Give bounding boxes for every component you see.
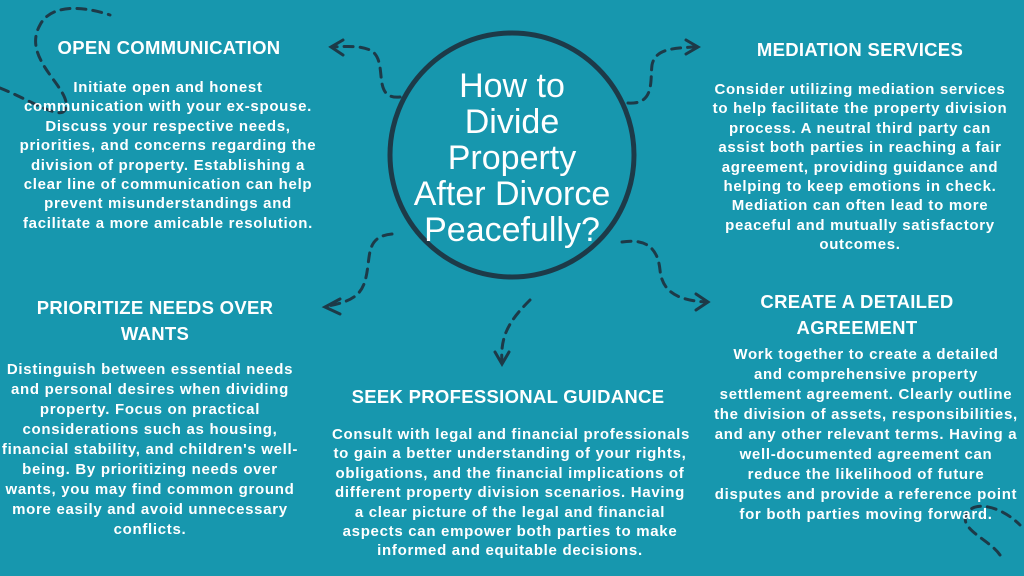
text: prioritize needs: and personal desires when dividing bbox=[11, 381, 289, 398]
text: create agreement: settlement agreement. Clearly outline bbox=[720, 386, 1012, 403]
circle bbox=[390, 33, 634, 277]
text: open communication: facilitate a more amicable resolution. bbox=[23, 215, 313, 232]
text: create agreement: for both parties moving forward. bbox=[739, 506, 993, 523]
text: prioritize needs: being. By prioritizing needs over bbox=[22, 461, 278, 478]
text: prioritize needs: financial stability, and children's well- bbox=[2, 441, 298, 458]
text: prioritize needs: considerations such as housing, bbox=[22, 421, 278, 438]
text: create agreement: and comprehensive property bbox=[754, 366, 978, 383]
text: mediation services: peaceful and mutually satisfactory bbox=[725, 217, 995, 234]
heading: prioritize needs: PRIORITIZE NEEDS OVER bbox=[37, 297, 273, 318]
text: prioritize needs bbox=[2, 361, 298, 538]
text: open communication: Discuss your respective needs, bbox=[45, 118, 291, 135]
text: create agreement: and any other relevant terms. Having a bbox=[715, 426, 1017, 443]
text: mediation services: Consider utilizing mediation services bbox=[715, 81, 1005, 98]
text: mediation services: to help facilitate the property division bbox=[713, 100, 1007, 117]
title: Property bbox=[448, 139, 576, 177]
title: How to bbox=[459, 67, 565, 105]
text: open communication bbox=[20, 79, 316, 232]
title bbox=[414, 67, 610, 249]
text: mediation services bbox=[712, 81, 1007, 253]
heading: open communication: OPEN COMMUNICATION bbox=[58, 37, 280, 58]
text: seek professional guidance: to gain a better understanding of your rights, bbox=[333, 445, 687, 462]
heading: mediation services: MEDIATION SERVICES bbox=[757, 39, 963, 60]
arrow: top-right bbox=[628, 40, 698, 103]
heading: seek professional guidance: SEEK PROFESSIONAL GUIDANCE bbox=[352, 386, 664, 407]
text: prioritize needs: Distinguish between essential needs bbox=[7, 361, 293, 378]
text: seek professional guidance: obligations, and the financial implications of bbox=[336, 465, 684, 482]
text: create agreement: well-documented agreement can bbox=[740, 446, 992, 463]
arrow: top-left bbox=[331, 40, 400, 97]
text: open communication: priorities, and concerns regarding the bbox=[20, 137, 316, 154]
text: open communication: communication with your ex-spouse. bbox=[24, 98, 312, 115]
text: seek professional guidance bbox=[332, 426, 690, 559]
title: Peacefully? bbox=[424, 211, 600, 249]
text: mediation services: Mediation can often lead to more bbox=[732, 197, 988, 214]
text: open communication: Initiate open and honest bbox=[73, 79, 263, 96]
text: open communication: clear line of communication can help bbox=[24, 176, 312, 193]
text: prioritize needs: conflicts. bbox=[114, 521, 186, 538]
text: open communication: division of property. Establishing a bbox=[31, 157, 305, 174]
text: prioritize needs: wants, you may find common ground bbox=[6, 481, 294, 498]
text: mediation services: process. A neutral third party can bbox=[729, 120, 991, 137]
heading: create agreement bbox=[760, 291, 954, 338]
text: seek professional guidance: informed and equitable decisions. bbox=[377, 542, 643, 559]
text: create agreement bbox=[714, 346, 1018, 523]
heading: prioritize needs: WANTS bbox=[121, 323, 189, 344]
text: mediation services: agreement, providing guidance and bbox=[722, 159, 998, 176]
heading: prioritize needs bbox=[37, 297, 273, 344]
decoration: bottom-right loop bbox=[965, 506, 1020, 555]
text: open communication: prevent misunderstandings and bbox=[44, 195, 292, 212]
text: seek professional guidance: different property division scenarios. Having bbox=[335, 484, 685, 501]
text: mediation services: assist both parties in reaching a fair bbox=[718, 139, 1002, 156]
text: create agreement: Work together to create a detailed bbox=[733, 346, 999, 363]
text: mediation services: outcomes. bbox=[819, 236, 901, 253]
text: seek professional guidance: Consult with legal and financial professionals bbox=[332, 426, 690, 443]
title: Divide bbox=[465, 103, 559, 141]
heading: create agreement: AGREEMENT bbox=[797, 317, 917, 338]
text: create agreement: the division of assets, responsibilities, bbox=[714, 406, 1018, 423]
text: mediation services: helping to keep emotions in check. bbox=[723, 178, 996, 195]
title: After Divorce bbox=[414, 175, 610, 213]
arrow: bottom-right bbox=[622, 241, 708, 310]
text: seek professional guidance: a clear picture of the legal and financial bbox=[355, 504, 665, 521]
text: create agreement: disputes and provide a reference point bbox=[715, 486, 1017, 503]
heading: create agreement: CREATE A DETAILED bbox=[760, 291, 954, 312]
text: prioritize needs: more easily and avoid unnecessary bbox=[12, 501, 288, 518]
arrow: bottom bbox=[495, 300, 530, 364]
decoration: top-left loop bbox=[0, 8, 110, 113]
text: create agreement: reduce the likelihood of future bbox=[748, 466, 984, 483]
arrow: bottom-left bbox=[325, 234, 392, 314]
text: seek professional guidance: aspects can empower both parties to make bbox=[343, 523, 677, 540]
text: prioritize needs: property. Focus on practical bbox=[40, 401, 260, 418]
